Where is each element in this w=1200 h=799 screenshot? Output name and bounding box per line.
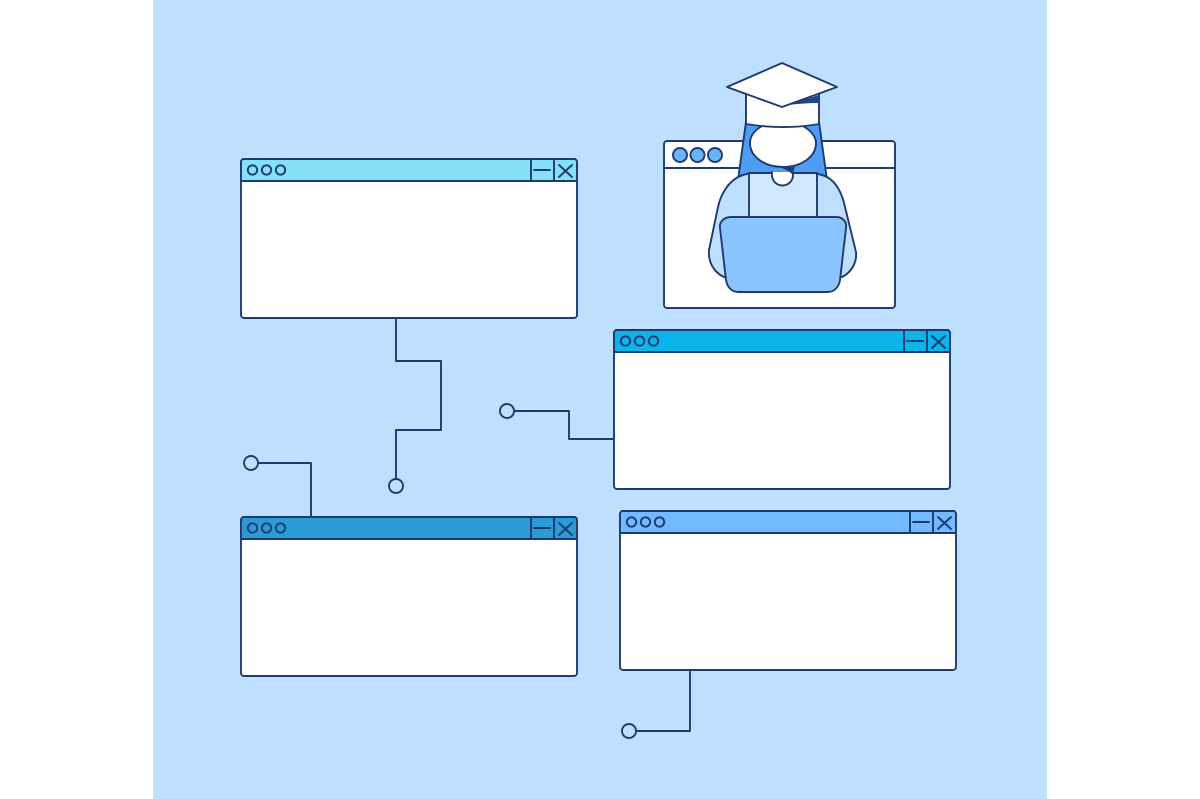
neck shadow bbox=[782, 167, 795, 174]
window: top left bbox=[241, 159, 577, 318]
neck bbox=[772, 172, 793, 186]
connector: bottom-right window to node bbox=[622, 670, 690, 738]
illustration: graduate at laptop bbox=[664, 63, 895, 308]
window: middle right bbox=[614, 330, 950, 489]
window: bottom right bbox=[620, 511, 956, 670]
connector: bottom-left window to node bbox=[244, 456, 311, 517]
cap shadow bbox=[787, 95, 819, 105]
background panel bbox=[153, 0, 1047, 799]
body bbox=[709, 173, 856, 277]
browser window behind graduate bbox=[664, 141, 895, 308]
connector: top-left window to node bbox=[389, 318, 441, 493]
laptop bbox=[720, 217, 846, 292]
shirt bbox=[749, 173, 817, 218]
connector: right window to node bbox=[500, 404, 614, 439]
cap band bbox=[746, 94, 819, 127]
cap board bbox=[727, 63, 837, 107]
window: bottom left bbox=[241, 517, 577, 676]
hair bbox=[738, 122, 827, 180]
face bbox=[750, 126, 816, 167]
